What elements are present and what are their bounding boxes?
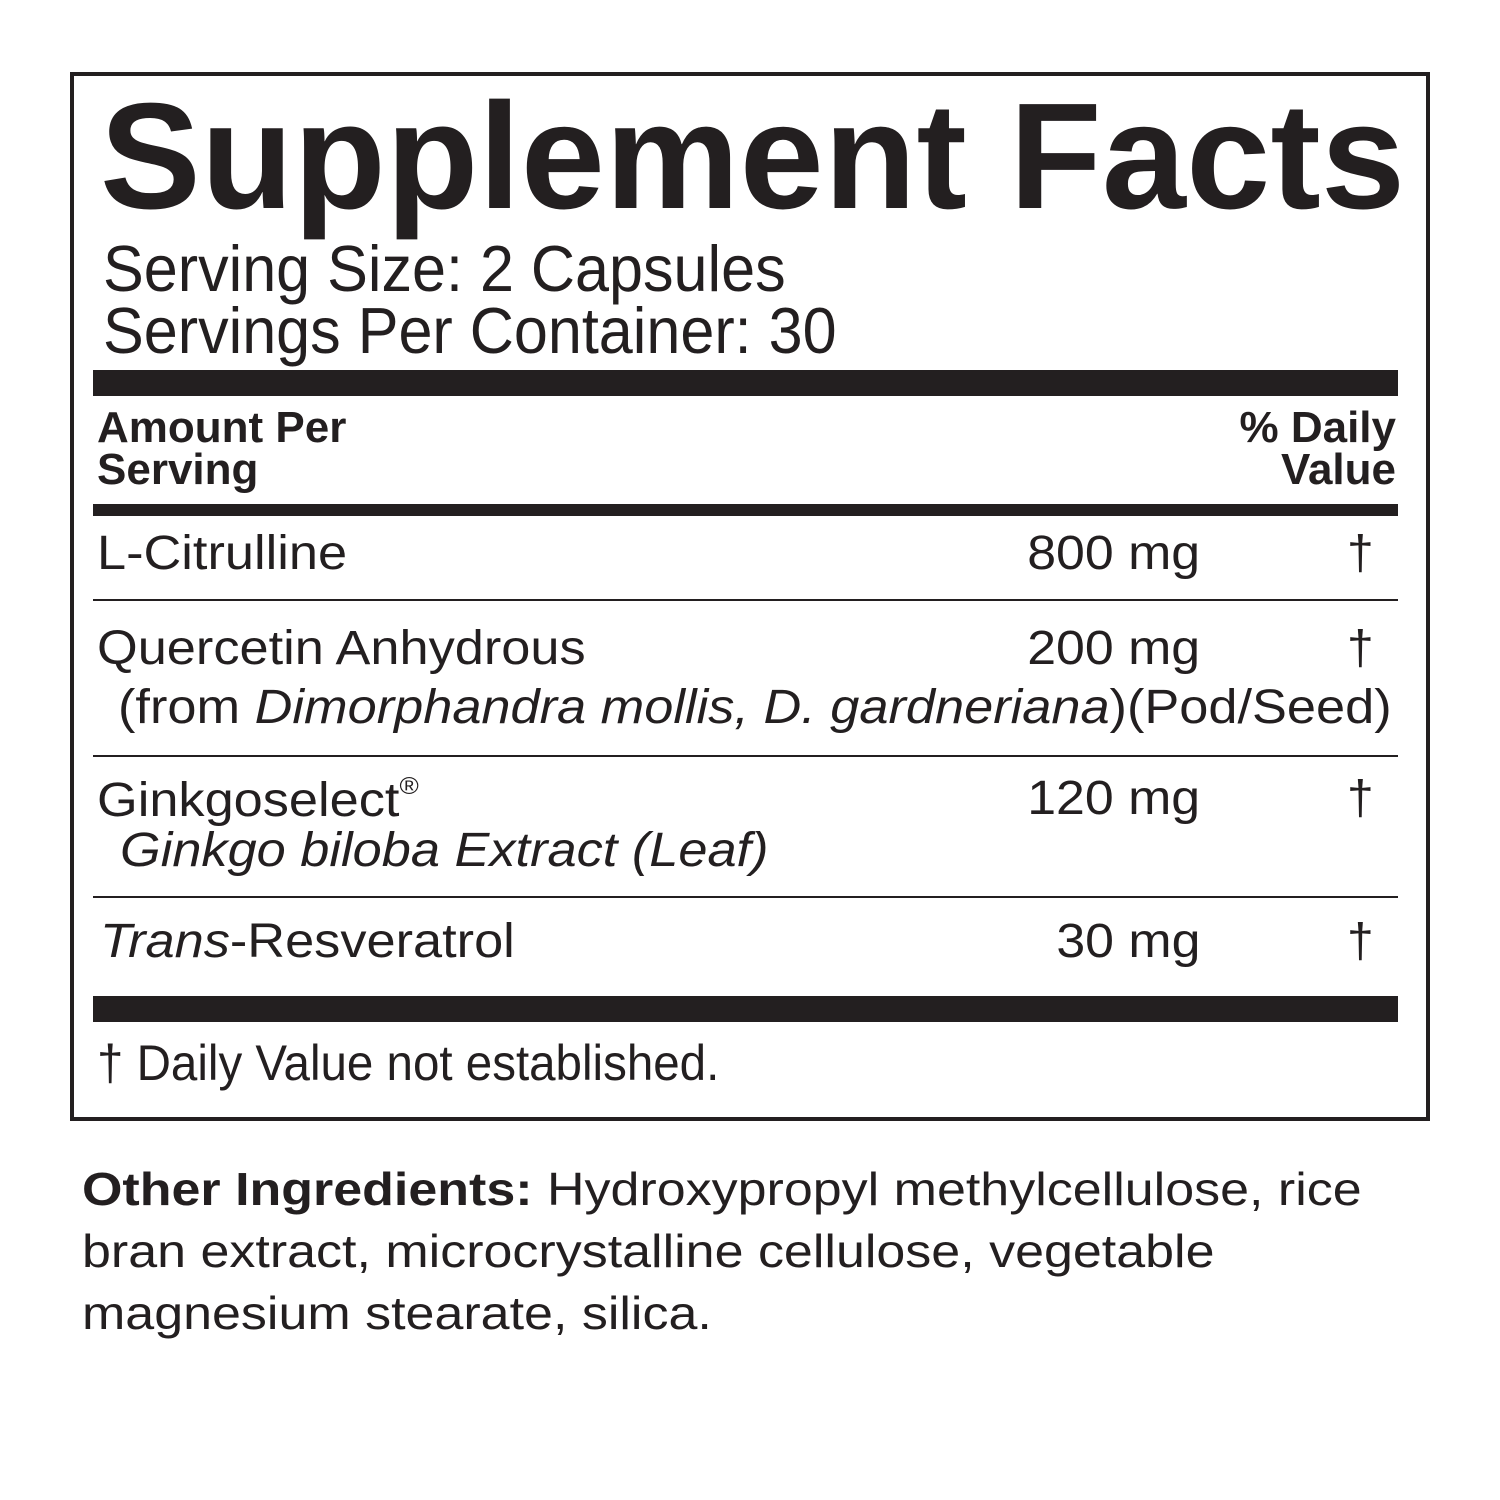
header: amount per serving <box>97 403 346 494</box>
other ingredients <box>82 1163 1362 1339</box>
row: L-Citrulline: † <box>1347 527 1374 580</box>
row: L-Citrulline: 800 mg <box>1027 527 1200 580</box>
panel: supplement facts box <box>70 72 1430 1121</box>
row: Quercetin: (from Dimorphandra mollis, D. gardneriana)(Pod/Seed) <box>118 681 1392 734</box>
row: Quercetin: Quercetin Anhydrous <box>97 622 586 675</box>
row: Trans-Resveratrol: Trans-Resveratrol <box>100 915 515 968</box>
servings per container: Servings Per Container: 30 <box>103 294 837 367</box>
header: daily value: Value <box>1281 445 1396 494</box>
title: Supplement Facts <box>100 71 1405 240</box>
row: Ginkgoselect: 120 mg <box>1027 772 1200 825</box>
row: Quercetin: 200 mg <box>1027 622 1200 675</box>
header: daily value: % Daily <box>1239 403 1396 452</box>
header: amount per serving: Serving <box>97 445 258 494</box>
row: L-Citrulline: L-Citrulline <box>97 527 347 580</box>
row: Ginkgoselect: Ginkgo biloba Extract (Leaf) <box>120 824 769 877</box>
other ingredients: Other Ingredients: Hydroxypropyl methylcellulose, rice <box>82 1163 1362 1215</box>
row: Trans-Resveratrol: † <box>1347 915 1374 968</box>
header: daily value <box>1239 403 1396 494</box>
serving size: Serving Size: 2 Capsules <box>103 232 786 305</box>
row: Trans-Resveratrol: 30 mg <box>1056 915 1200 968</box>
row: Ginkgoselect <box>97 772 1374 877</box>
row: Ginkgoselect: Ginkgoselect® <box>97 773 419 827</box>
row: Trans-Resveratrol <box>100 915 1374 968</box>
header: amount per serving: Amount Per <box>97 403 346 452</box>
row: Ginkgoselect: † <box>1347 772 1374 825</box>
other ingredients: magnesium stearate, silica. <box>82 1287 712 1339</box>
row: Quercetin: † <box>1347 622 1374 675</box>
row: L-Citrulline <box>97 527 1374 580</box>
row: Quercetin <box>97 622 1392 734</box>
footnote: † Daily Value not established. <box>97 1035 719 1091</box>
other ingredients: bran extract, microcrystalline cellulose, vegetable <box>82 1225 1215 1277</box>
